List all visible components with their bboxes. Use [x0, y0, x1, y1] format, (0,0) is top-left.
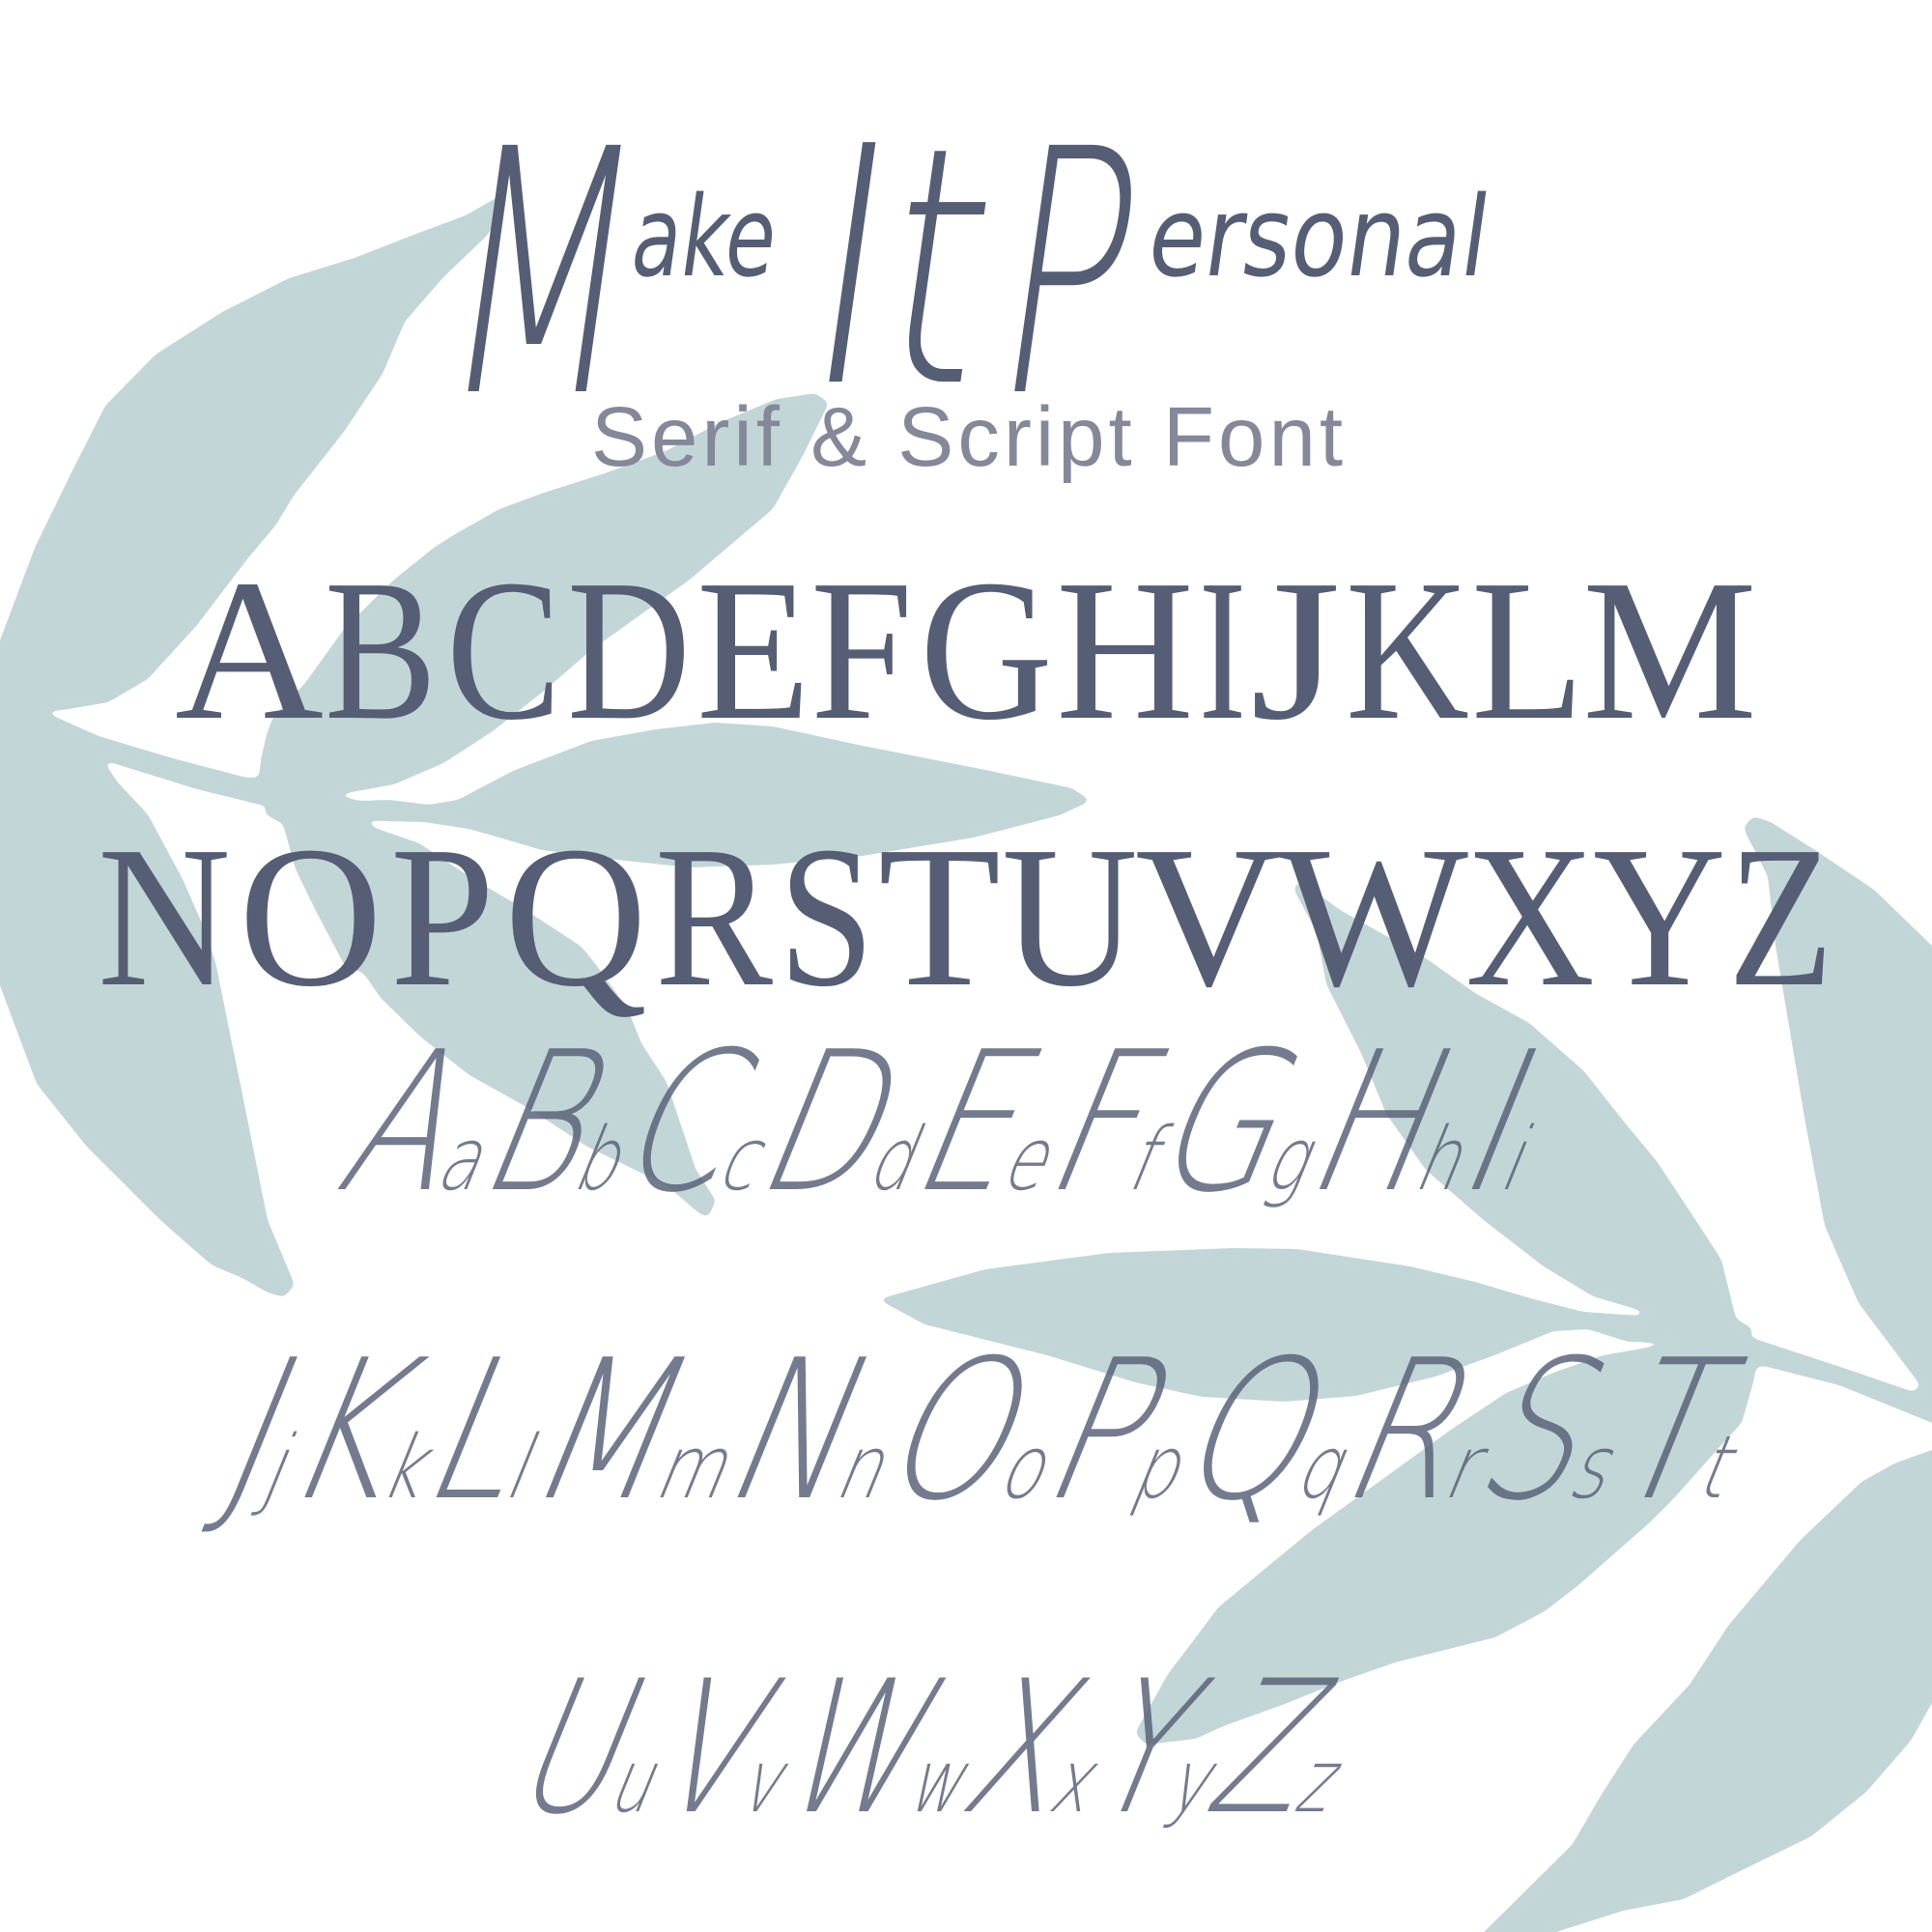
serif alphabet: second row: P [390, 806, 495, 1029]
serif alphabet: first row: A [175, 539, 324, 762]
serif alphabet: first row: D [567, 539, 691, 762]
serif alphabet: first row: E [696, 539, 810, 762]
serif alphabet: first row: J [1250, 539, 1341, 762]
leaf branch: left [0, 196, 1091, 1297]
title: ake [624, 174, 785, 302]
title: ersonal [1141, 174, 1497, 302]
serif alphabet: second row: W [1279, 806, 1468, 1029]
serif alphabet: first row: M [1582, 539, 1757, 762]
serif alphabet: second row: O [239, 806, 383, 1029]
serif alphabet: second row: Q [504, 806, 647, 1029]
serif alphabet: second row: Y [1593, 806, 1726, 1029]
serif alphabet: first row: F [810, 539, 913, 762]
script alphabet: first row: AaBbCcDdEeFfGgHhIi [315, 1010, 1588, 1236]
serif alphabet: second row: X [1465, 806, 1595, 1029]
serif alphabet: second row: R [655, 806, 774, 1029]
leaf branch: right [878, 816, 1932, 1745]
serif alphabet: first row: G [920, 539, 1053, 762]
serif alphabet: second row: U [1002, 806, 1138, 1029]
serif alphabet: second row: T [878, 806, 1001, 1029]
serif alphabet: second row: S [779, 806, 874, 1029]
serif alphabet: first row: B [325, 539, 437, 762]
serif alphabet: first row: K [1346, 539, 1469, 762]
title: It [787, 77, 1015, 460]
serif alphabet: first row: I [1199, 539, 1246, 762]
script alphabet: third row: UuVvWwXxYyZz [492, 1641, 1394, 1855]
leaf: bottom right [1455, 1439, 1932, 1932]
serif alphabet: first row: L [1471, 539, 1584, 762]
serif alphabet: second row: V [1135, 806, 1282, 1029]
script alphabet: second row: JjKkLlMmNnOoPpQqRrSsTt [196, 1319, 1794, 1544]
serif alphabet: first row: H [1056, 539, 1194, 762]
title: M [422, 78, 666, 471]
subtitle: Serif & Script Font [591, 390, 1343, 484]
title: P [978, 78, 1162, 471]
serif alphabet: second row: Z [1728, 806, 1833, 1029]
serif alphabet: first row: C [446, 539, 561, 762]
serif alphabet: second row: N [98, 806, 231, 1029]
